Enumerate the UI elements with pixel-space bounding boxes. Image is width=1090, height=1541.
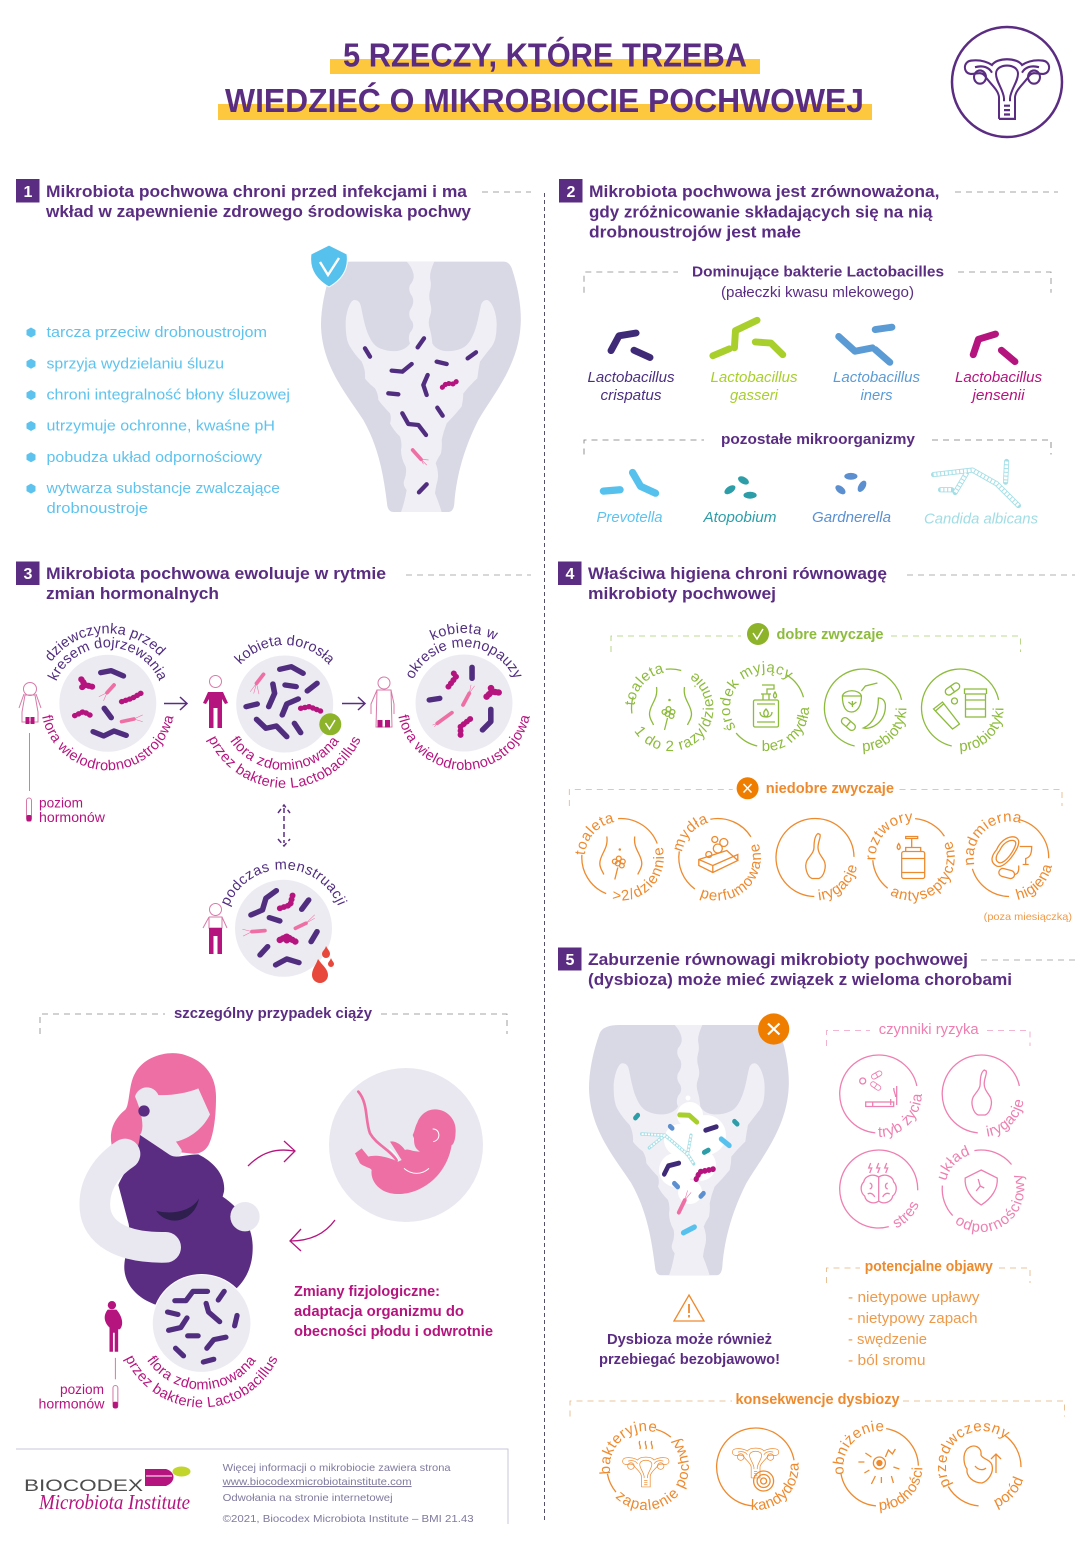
flora circle: adult woman: przez bakterie Lactobacillus	[206, 736, 360, 788]
other microorganism icons	[603, 461, 1018, 506]
heading 1: wkład w zapewnienie zdrowego środowiska pochwy	[45, 202, 472, 221]
heading 4	[558, 562, 1075, 603]
panel: section 1	[16, 179, 531, 517]
icon: orange X	[758, 1013, 789, 1045]
badge: immune system: odpornościowy	[956, 1176, 1026, 1234]
callout: physiological changes: obecności płodu i odwrotnie	[294, 1323, 493, 1340]
flora circle: menstruation	[222, 862, 348, 983]
subheading: dominant bacteria: (pałeczki kwasu mlekowego)	[721, 284, 914, 301]
badge: excessive hygiene: higiena	[1016, 865, 1052, 900]
icon: girl figure and hormone gauge	[19, 682, 41, 822]
badge: douching risk	[942, 1054, 1024, 1137]
text: asymptomatic note: przebiegać bezobjawowo!	[599, 1351, 780, 1368]
badge: preterm birth: przedwczesny	[938, 1423, 1010, 1488]
subheading: good habits	[611, 623, 1020, 652]
symptoms list: - swędzenie	[848, 1331, 927, 1348]
heading 3	[16, 562, 531, 603]
heading 1: 1	[24, 184, 33, 201]
heading 3: 3	[24, 566, 33, 583]
flora circle: menopause: flora wielodrobnoustrojowa	[398, 714, 530, 770]
heading 4: 4	[566, 566, 575, 583]
footer text	[222, 1462, 474, 1525]
badge: prebiotics	[824, 668, 906, 754]
benefits list: chroni integralność błony śluzowej	[46, 386, 290, 404]
badge: bacterial vaginosis: bakteryjne	[599, 1422, 656, 1474]
badge: reduced fertility: płodności	[879, 1468, 922, 1514]
symptoms list: - ból sromu	[848, 1352, 926, 1369]
subheading: good habits: dobre zwyczaje	[776, 626, 884, 643]
arrow: to menopause	[342, 697, 365, 710]
flora circle: girl before puberty: dziewczynka przed	[46, 622, 166, 660]
labels: Lactobacillus species: Lactobacillus	[588, 370, 674, 386]
footer text: www.biocodexmicrobiotainstitute.com	[222, 1476, 412, 1488]
icon: warning triangle	[674, 1295, 704, 1321]
icon: woman figure during menstruation	[203, 904, 227, 954]
belly shadow	[156, 1198, 199, 1221]
hand	[230, 1202, 260, 1231]
badge: douching risk: irygacje	[986, 1100, 1024, 1137]
badge: bacterial vaginosis: zapalenie pochwy	[616, 1438, 689, 1511]
badge: preterm birth	[938, 1423, 1024, 1510]
badge: stress	[839, 1149, 918, 1229]
badge: probiotics: probiotyki	[960, 708, 1004, 754]
icon: blood drops	[312, 946, 334, 983]
illustration: fetus in circle	[329, 1068, 483, 1222]
labels: Lactobacillus species: crispatus	[600, 388, 662, 404]
flora label pregnancy: flora zdominowana	[148, 1356, 256, 1390]
benefits list: utrzymuje ochronne, kwaśne pH	[46, 418, 275, 434]
badge: candidiasis	[716, 1427, 799, 1510]
title	[218, 36, 872, 120]
badge: prebiotics: prebiotyki	[862, 708, 906, 754]
heading 3: zmian hormonalnych	[46, 584, 219, 603]
labels: other microorganisms: Prevotella	[596, 510, 662, 526]
flora circle: adult woman	[206, 635, 360, 788]
subheading: risk factors: czynniki ryzyka	[879, 1021, 979, 1038]
flora circle: girl before puberty	[42, 622, 174, 770]
badge: excess toilet	[575, 815, 664, 901]
benefits list: pobudza układ odpornościowy	[46, 449, 263, 466]
labels: Lactobacillus species: gasseri	[730, 388, 779, 404]
title: 5 RZECZY, KTÓRE TRZEBA	[343, 36, 747, 74]
Lactobacillus bacteria icons	[611, 320, 1015, 362]
benefits list	[26, 324, 290, 517]
heading 5: 5	[566, 952, 575, 969]
label: hormone level: poziom	[39, 794, 83, 810]
badge: preterm birth: poród	[994, 1476, 1024, 1510]
labels: Lactobacillus species: Lactobacillus	[710, 370, 798, 386]
arrow: mother to fetus	[248, 1141, 295, 1166]
badge: perfumed soaps: mydła	[674, 816, 708, 852]
badge: probiotics	[920, 668, 1004, 754]
center divider	[544, 193, 546, 1522]
badge: good toilet: toaleta	[625, 666, 664, 705]
labels: other microorganisms: Atopobium	[702, 510, 776, 526]
badge: excess toilet: >2/dziennie	[612, 848, 664, 901]
flora circle: menstruation: podczas menstruacji	[222, 862, 348, 907]
labels: Lactobacillus species: iners	[860, 388, 892, 404]
labels: Lactobacillus species: jensenii	[970, 388, 1025, 404]
badge: excessive hygiene: nadmierna	[966, 813, 1021, 865]
flora circle: menopause: kobieta w	[429, 622, 498, 640]
heading 2: drobnoustrojów jest małe	[589, 222, 801, 242]
small pregnant figure	[105, 1301, 122, 1352]
benefits list: wytwarza substancje zwalczające	[45, 480, 280, 497]
label: hormone level	[39, 794, 106, 825]
subheading: bad habits	[569, 777, 1062, 806]
subheading: bad habits: niedobre zwyczaje	[766, 780, 894, 797]
heading 5: Zaburzenie równowagi mikrobioty pochwowej	[588, 950, 968, 969]
badge: soap-free cleanser: środek myjący	[720, 661, 793, 730]
badge: lifestyle	[839, 1054, 922, 1139]
labels: Lactobacillus species: Lactobacillus	[833, 370, 920, 386]
heading 4: Właściwa higiena chroni równowagę	[588, 564, 887, 583]
label: hormone level pregnancy: poziom	[60, 1381, 104, 1397]
flora circle: adult woman: flora zdominowana	[230, 736, 340, 770]
panel: section 3	[16, 562, 531, 1412]
flora circle: girl before puberty: flora wielodrobnoustrojowa	[42, 714, 174, 770]
heading 2	[559, 179, 1058, 242]
arrow: fetus to mother	[290, 1220, 335, 1251]
symptoms list: - nietypowe upławy	[848, 1289, 980, 1306]
badge: douching	[775, 818, 856, 902]
earring	[138, 1105, 150, 1117]
badge: excess toilet: toaleta	[575, 815, 614, 854]
flora circle: adult woman: kobieta dorosła	[234, 635, 333, 665]
labels: other microorganisms: Gardnerella	[812, 510, 891, 526]
subheading: pregnancy	[40, 1005, 507, 1034]
callout: physiological changes: Zmiany fizjologiczne:	[294, 1283, 440, 1300]
subheading: pregnancy: szczególny przypadek ciąży	[174, 1005, 373, 1022]
footer text: Odwołania na stronie internetowej	[223, 1492, 393, 1504]
subheading: other microorganisms: pozostałe mikroorganizmy	[721, 431, 916, 448]
badge: perfumed soaps: perfumowane	[700, 844, 761, 900]
heading 2: gdy zróżnicowanie składających się na nią	[589, 202, 933, 222]
badge: good toilet: 1 do 2 razy/dziennie	[634, 674, 714, 752]
dress	[118, 1135, 253, 1305]
footer text: Więcej informacji o mikrobiocie zawiera strona	[223, 1462, 451, 1474]
benefits list: tarcza przeciw drobnoustrojom	[46, 324, 267, 341]
subheading: potential symptoms: potencjalne objawy	[865, 1258, 993, 1275]
heading 3: Mikrobiota pochwowa ewoluuje w rytmie	[46, 564, 386, 583]
vagina illustration with balanced flora	[311, 245, 521, 512]
arrow: to adult woman	[164, 697, 187, 710]
badge: candidiasis: kandydoza	[752, 1462, 799, 1510]
badge: bacterial vaginosis	[599, 1422, 689, 1511]
badge: perfumed soaps	[674, 816, 761, 900]
labels: other microorganisms: Candida albicans	[924, 512, 1038, 528]
heading 1: Mikrobiota pochwowa chroni przed infekcjami i ma	[46, 182, 468, 201]
panel: section 5	[558, 948, 1075, 1514]
face	[135, 1087, 210, 1157]
arrow: menstruation double-headed	[278, 805, 290, 846]
badge: douching: irygacje	[818, 865, 856, 902]
heading 5	[558, 948, 1075, 989]
flora circle	[152, 1274, 251, 1372]
label: hormone level: hormonów	[39, 809, 106, 825]
badge: antiseptic solutions: roztwory	[868, 814, 912, 860]
panel: section 2	[559, 179, 1058, 528]
footer	[16, 1449, 508, 1525]
label: hormone level pregnancy	[38, 1381, 105, 1412]
callout: physiological changes	[294, 1283, 493, 1340]
text: asymptomatic note	[599, 1331, 780, 1368]
logo: Microbiota Institute	[38, 1490, 190, 1514]
heading 1	[16, 179, 531, 221]
badge: excessive hygiene	[966, 813, 1052, 900]
flora label pregnancy: przez bakterie Lactobacillus	[123, 1356, 277, 1408]
labels: Lactobacillus species: Lactobacillus	[955, 370, 1042, 386]
hair	[111, 1053, 216, 1154]
logo: BIOCODEX	[24, 1476, 143, 1495]
heading 2: 2	[567, 184, 576, 201]
benefits list: drobnoustroje	[46, 500, 148, 517]
labels: other microorganisms	[596, 510, 1038, 528]
badge: antiseptic solutions: antyseptyczne	[890, 842, 955, 904]
icon: green check	[319, 713, 341, 735]
flora circle: girl before puberty: kresem dojrzewania	[47, 637, 165, 682]
logo	[24, 1466, 190, 1514]
badge: soap-free cleanser: bez mydła	[762, 707, 810, 752]
subheading: dominant bacteria	[584, 264, 1051, 301]
badge: antiseptic solutions	[868, 814, 955, 904]
text: asymptomatic note: Dysbioza może również	[607, 1331, 772, 1348]
labels: Lactobacillus species	[588, 370, 1042, 404]
symptoms list	[848, 1289, 980, 1369]
badge: reduced fertility: obniżenie	[832, 1420, 884, 1474]
note: outside menstruation: (poza miesiączką)	[984, 911, 1072, 923]
badge: reduced fertility	[832, 1420, 922, 1514]
icon: adult woman figure	[203, 676, 228, 728]
symptoms list: - nietypowy zapach	[848, 1310, 978, 1327]
icon: menopausal woman figure	[371, 677, 394, 728]
label: hormone level pregnancy: hormonów	[38, 1396, 105, 1412]
subheading: dominant bacteria: Dominujące bakterie Lactobacilles	[692, 264, 944, 280]
badge: lifestyle: tryb życia	[878, 1094, 922, 1139]
icon: uterus in circle	[952, 27, 1062, 137]
arm	[95, 1154, 166, 1247]
subheading: risk factors	[826, 1021, 1030, 1046]
badge: immune system	[938, 1144, 1026, 1234]
subheading: potential symptoms	[826, 1258, 1030, 1283]
panel: section 4	[558, 562, 1075, 923]
illustration: pregnant woman	[95, 1053, 260, 1408]
title: WIEDZIEĆ O MIKROBIOCIE POCHWOWEJ	[225, 82, 864, 119]
badge: immune system: układ	[938, 1144, 970, 1180]
subheading: consequences	[570, 1391, 1064, 1416]
heading 5: (dysbioza) może mieć związek z wieloma chorobami	[588, 970, 1012, 989]
vagina illustration with dysbiosis	[589, 1013, 789, 1275]
subheading: consequences: konsekwencje dysbiozy	[736, 1391, 900, 1408]
icon: shield check	[311, 245, 347, 287]
heading 4: mikrobioty pochwowej	[588, 584, 776, 603]
flora circle: menopause: okresie menopauzy	[408, 639, 522, 678]
footer text: ©2021, Biocodex Microbiota Institute – BMI 21.43	[223, 1513, 474, 1525]
benefits list: sprzyja wydzielaniu śluzu	[46, 356, 224, 372]
subheading: other microorganisms	[584, 431, 1051, 454]
heading 2: Mikrobiota pochwowa jest zrównoważona,	[589, 182, 940, 201]
flora circle: menopause	[398, 622, 530, 770]
badge: stress: stres	[894, 1202, 918, 1228]
callout: physiological changes: adaptacja organizmu do	[294, 1303, 464, 1320]
badge: soap-free cleanser	[720, 661, 810, 752]
